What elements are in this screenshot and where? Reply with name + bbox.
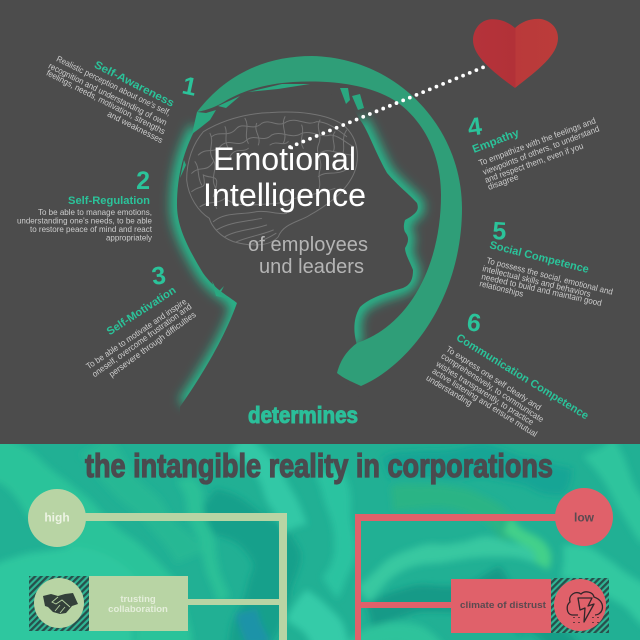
number 2: 2 bbox=[136, 167, 150, 195]
subtitle bbox=[248, 234, 368, 278]
head fill bbox=[177, 88, 418, 444]
ring: green arc around head bbox=[180, 56, 462, 386]
number 6: 6 bbox=[465, 308, 483, 338]
body text: understanding one's needs, to be able bbox=[17, 216, 152, 226]
title: Emotional bbox=[213, 141, 356, 177]
head outline glow bbox=[177, 120, 418, 404]
body text: viewpoints of others, to understand bbox=[481, 123, 601, 177]
item 1: Self-Awareness bbox=[45, 54, 199, 145]
body text: To empathize with the feelings and bbox=[477, 115, 597, 168]
subtitle: of employees bbox=[248, 234, 368, 256]
body text: understanding bbox=[424, 373, 474, 408]
item 3: Self-Motivation bbox=[84, 261, 198, 379]
climate of distrust box bbox=[451, 579, 551, 633]
body text: Realistic perception about one's self, bbox=[55, 54, 172, 118]
high label: high bbox=[44, 510, 70, 524]
determines label: determines bbox=[248, 402, 358, 428]
dotted line from brain to heart bbox=[290, 67, 484, 147]
ragged hair edges bbox=[180, 84, 364, 178]
heading: Self-Regulation bbox=[68, 195, 150, 207]
subtitle: und leaders bbox=[259, 256, 364, 278]
panel: high branch bbox=[28, 489, 287, 640]
brain line drawing bbox=[187, 112, 357, 245]
body text: to restore peace of mind and react bbox=[30, 224, 153, 234]
body text: wishes transparently, to practice bbox=[434, 358, 536, 427]
body text bbox=[17, 207, 153, 242]
body text: To possess the social, emotional and bbox=[486, 255, 614, 297]
hatched icon tile bbox=[29, 576, 89, 631]
box label: climate of distrust bbox=[460, 600, 546, 610]
body text: disagree bbox=[486, 171, 520, 192]
body text: and respect them, even if you bbox=[483, 141, 585, 185]
body text: and weaknesses bbox=[106, 109, 165, 145]
heading: Self-Awareness bbox=[92, 59, 176, 110]
box label bbox=[108, 594, 168, 615]
panel: dark upper background bbox=[0, 0, 640, 444]
item 2: Self-Regulation bbox=[17, 167, 153, 242]
body text bbox=[477, 115, 601, 192]
head silhouette with glow bbox=[177, 88, 418, 444]
body text: needed to build and maintain good bbox=[481, 271, 603, 308]
box label: trusting bbox=[120, 594, 156, 605]
high circle bbox=[28, 489, 86, 547]
body text: To be able to motivate and inspire bbox=[84, 296, 189, 371]
heading: the intangible reality in corporations: the intangible reality in corporations bbox=[85, 447, 553, 484]
heading: Communication Competence bbox=[454, 332, 591, 422]
connector lines bbox=[355, 514, 557, 640]
item 5: Social Competence bbox=[479, 217, 614, 308]
number 5: 5 bbox=[492, 217, 507, 246]
body text: To express one self clearly and bbox=[444, 344, 543, 412]
item 6: Communication Competence bbox=[424, 308, 591, 439]
body text: comprehensively, to communicate bbox=[439, 351, 546, 424]
connector lines bbox=[84, 513, 287, 640]
body text: feelings, needs, motivation, strengths bbox=[45, 68, 167, 136]
number 1: 1 bbox=[180, 71, 199, 102]
low label: low bbox=[574, 510, 595, 524]
body text: active listening and ensure mutual bbox=[430, 366, 539, 439]
panel: low branch bbox=[355, 488, 613, 640]
heading: Self-Motivation bbox=[105, 284, 179, 338]
box label: collaboration bbox=[108, 604, 168, 615]
body text: persevere through difficulties bbox=[107, 309, 198, 379]
body text: relationships bbox=[479, 278, 525, 299]
hatched icon tile bbox=[551, 578, 609, 633]
heading: Empathy bbox=[471, 127, 522, 156]
body text: To be able to manage emotions, bbox=[38, 207, 152, 217]
body text: intellectual skills and behaviors bbox=[482, 263, 592, 299]
low circle bbox=[555, 488, 613, 546]
item 4: Empathy bbox=[466, 112, 601, 192]
number 3: 3 bbox=[150, 261, 168, 291]
body text: oneself, overcome frustration and bbox=[90, 301, 194, 379]
heading: Social Competence bbox=[488, 239, 590, 276]
trusting collaboration box bbox=[89, 576, 188, 631]
number 4: 4 bbox=[466, 112, 484, 142]
title: Intelligence bbox=[203, 177, 366, 213]
title bbox=[203, 141, 366, 213]
icon: handshake bbox=[34, 578, 84, 628]
body text: recognition and understanding of own bbox=[47, 61, 169, 128]
panel: swirling green background bbox=[0, 444, 640, 640]
body text: appropriately bbox=[106, 232, 153, 242]
ring arc bbox=[197, 56, 462, 386]
icon: storm cloud bbox=[554, 579, 606, 631]
icon: heart bbox=[473, 19, 558, 88]
